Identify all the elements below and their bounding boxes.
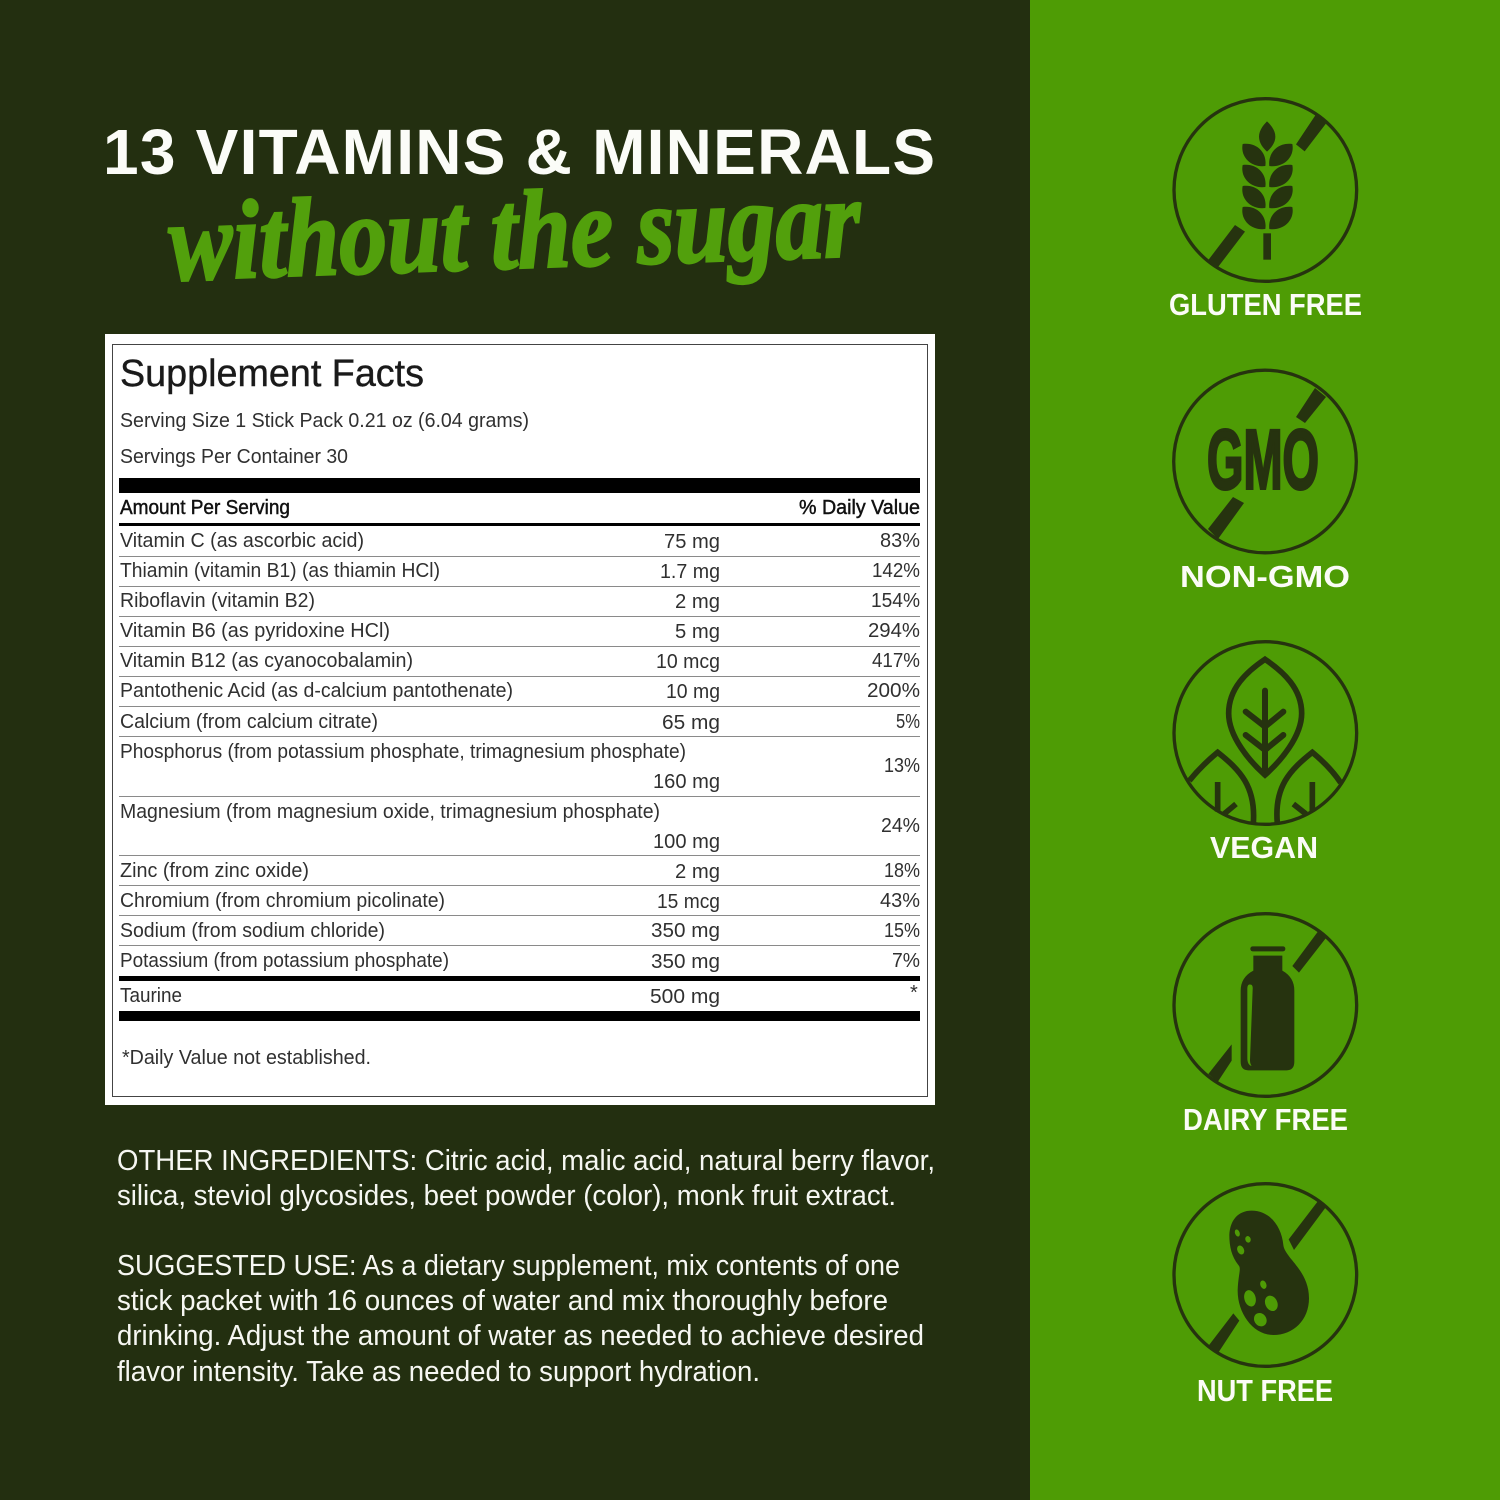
text block: other ingredients: OTHER INGREDIENTS: Citric acid, malic acid, natural berry flavor, [117, 1145, 935, 1177]
row: sodium: Sodium (from sodium chloride) [120, 920, 385, 942]
row: magnesium [119, 801, 920, 856]
row: zinc: 18% [884, 860, 920, 882]
text block: suggested use: drinking. Adjust the amount of water as needed to achieve desired [117, 1320, 924, 1352]
table header: Amount Per Serving [120, 497, 290, 519]
servings per container: Servings Per Container 30 [120, 446, 348, 468]
row: thiamin [119, 560, 920, 587]
row: calcium [119, 711, 920, 737]
row: potassium: 350 mg [651, 951, 720, 973]
label: gluten free: GLUTEN FREE [1169, 288, 1362, 322]
title: 13 VITAMINS & MINERALS [103, 116, 935, 188]
script subtitle: without the sugar [167, 157, 864, 305]
row: vitamin B6: Vitamin B6 (as pyridoxine HCl) [120, 620, 390, 642]
text block: suggested use: flavor intensity. Take as needed to support hydration. [117, 1356, 760, 1388]
row: vitamin B12 [119, 650, 920, 677]
label: vegan: VEGAN [1210, 831, 1318, 865]
row: riboflavin [119, 590, 920, 617]
row: potassium: 7% [892, 950, 920, 972]
table header [119, 497, 920, 526]
text block: suggested use: stick packet with 16 ounces of water and mix thoroughly before [117, 1285, 888, 1317]
icon: nut free peanut [1174, 1184, 1357, 1366]
row: thiamin: Thiamin (vitamin B1) (as thiamin HCl) [120, 560, 440, 582]
row: phosphorus [119, 741, 920, 797]
icon: dairy free bottle [1174, 914, 1357, 1096]
thick rule top [119, 478, 920, 493]
label: non-GMO: NON-GMO [1180, 560, 1350, 594]
text block: other ingredients [117, 1145, 935, 1212]
row: zinc: Zinc (from zinc oxide) [120, 860, 309, 882]
panel: supplement facts [105, 334, 935, 1105]
row: taurine: Taurine [120, 985, 182, 1007]
row: pantothenic acid: 200% [867, 680, 920, 702]
icon: vegan leaves [1174, 642, 1357, 824]
icon: non-GMO: GMO [1207, 412, 1319, 506]
row: riboflavin: Riboflavin (vitamin B2) [120, 590, 315, 612]
heading: supplement facts: Supplement Facts [120, 353, 424, 395]
row: vitamin C: Vitamin C (as ascorbic acid) [120, 530, 364, 552]
row: vitamin B6 [119, 620, 920, 647]
row: pantothenic acid: Pantothenic Acid (as d-calcium pantothenate) [120, 680, 513, 702]
text block: other ingredients: silica, steviol glycosides, beet powder (color), monk fruit extract. [117, 1180, 896, 1212]
row: zinc [119, 860, 920, 886]
row: vitamin B12: 417% [872, 650, 920, 672]
row: phosphorus: 13% [884, 755, 920, 777]
row: sodium [119, 920, 920, 946]
label: nut free: NUT FREE [1197, 1374, 1333, 1408]
footnote: *Daily Value not established. [122, 1047, 371, 1069]
row: pantothenic acid: 10 mg [666, 681, 720, 703]
row: thiamin: 1.7 mg [660, 561, 720, 583]
row: calcium: 5% [896, 711, 920, 733]
row: potassium: Potassium (from potassium phosphate) [120, 950, 449, 972]
panel: dark green background [0, 0, 1030, 1500]
row: chromium: 43% [880, 890, 920, 912]
serving size: Serving Size 1 Stick Pack 0.21 oz (6.04 grams) [120, 410, 529, 432]
label: dairy free: DAIRY FREE [1183, 1103, 1348, 1137]
icon: non-GMO [1174, 370, 1356, 553]
row: chromium: Chromium (from chromium picolinate) [120, 890, 445, 912]
text block: suggested use: SUGGESTED USE: As a dietary supplement, mix contents of one [117, 1250, 900, 1282]
row: zinc: 2 mg [675, 861, 720, 883]
row: taurine: 500 mg [650, 986, 720, 1008]
row: vitamin B12: 10 mcg [656, 651, 720, 673]
row: magnesium: 24% [881, 815, 920, 837]
text block: suggested use [117, 1250, 924, 1388]
row: phosphorus: Phosphorus (from potassium phosphate, trimagnesium phosphate) [120, 741, 686, 763]
row: calcium: 65 mg [662, 712, 720, 734]
row: thiamin: 142% [872, 560, 920, 582]
row: vitamin C [119, 530, 920, 557]
row: vitamin B12: Vitamin B12 (as cyanocobalamin) [120, 650, 413, 672]
row: vitamin C: 75 mg [664, 531, 720, 553]
row: sodium: 350 mg [651, 920, 720, 942]
row: phosphorus: 160 mg [653, 771, 720, 793]
row: sodium: 15% [884, 920, 920, 942]
row: taurine [119, 982, 920, 1021]
row: potassium [119, 950, 920, 981]
row: magnesium: Magnesium (from magnesium oxide, trimagnesium phosphate) [120, 801, 660, 823]
row: chromium: 15 mcg [657, 891, 720, 913]
panel: bright green sidebar [1030, 0, 1500, 1500]
row: riboflavin: 154% [871, 590, 920, 612]
row: pantothenic acid [119, 680, 920, 707]
row: vitamin C: 83% [880, 530, 920, 552]
row: magnesium: 100 mg [653, 831, 720, 853]
row: chromium [119, 890, 920, 916]
row: taurine: * [910, 982, 918, 1004]
row: vitamin B6: 294% [868, 620, 920, 642]
row: riboflavin: 2 mg [675, 591, 720, 613]
icon: gluten free wheat [1174, 99, 1357, 281]
row: vitamin B6: 5 mg [675, 621, 720, 643]
table header: % Daily Value [799, 497, 920, 519]
row: calcium: Calcium (from calcium citrate) [120, 711, 378, 733]
